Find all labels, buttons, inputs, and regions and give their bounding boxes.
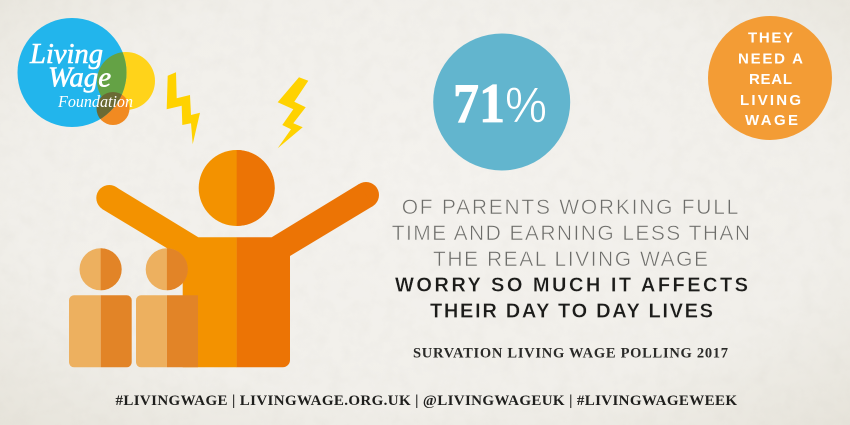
callout: they need a real living wage: LIVING	[740, 92, 801, 109]
text block: emphasised statement	[395, 275, 748, 322]
stat circle: 71%: 71	[453, 73, 505, 135]
callout: they need a real living wage: NEED A	[738, 50, 803, 67]
source line: SURVATION LIVING WAGE POLLING 2017	[413, 346, 728, 362]
icon: left lightning bolt	[167, 72, 200, 144]
icon: adult figure with raised arms	[96, 150, 379, 367]
logo: Living Wage Foundation: Wage	[48, 63, 111, 94]
footer hashtags and links: #LIVINGWAGE | LIVINGWAGE.ORG.UK | @LIVINGWAGEUK | #LIVINGWAGEWEEK	[116, 393, 737, 409]
logo: Living Wage Foundation: Foundation	[57, 92, 133, 111]
stat circle: 71%	[433, 34, 570, 170]
text block: emphasised statement: THEIR DAY TO DAY LIVES	[430, 300, 713, 322]
text block: description of parents: THE REAL LIVING WAGE	[433, 248, 708, 271]
callout: they need a real living wage: THEY	[748, 29, 793, 46]
icon: first child figure	[69, 248, 132, 367]
text block: description of parents	[392, 196, 750, 271]
text block: description of parents: TIME AND EARNING LESS THAN	[392, 222, 750, 245]
text block: description of parents: OF PARENTS WORKING FULL	[402, 196, 738, 219]
logo: Living Wage Foundation	[18, 18, 155, 127]
callout: they need a real living wage	[708, 16, 832, 140]
icon: right lightning bolt	[278, 77, 308, 148]
logo: Living Wage Foundation: Living	[29, 39, 103, 70]
callout: they need a real living wage: REAL	[749, 71, 792, 88]
icon: second child figure	[136, 248, 198, 367]
callout: they need a real living wage: WAGE	[745, 112, 798, 129]
stat circle: 71%: %	[505, 77, 547, 133]
text block: emphasised statement: WORRY SO MUCH IT AFFECTS	[395, 275, 748, 297]
